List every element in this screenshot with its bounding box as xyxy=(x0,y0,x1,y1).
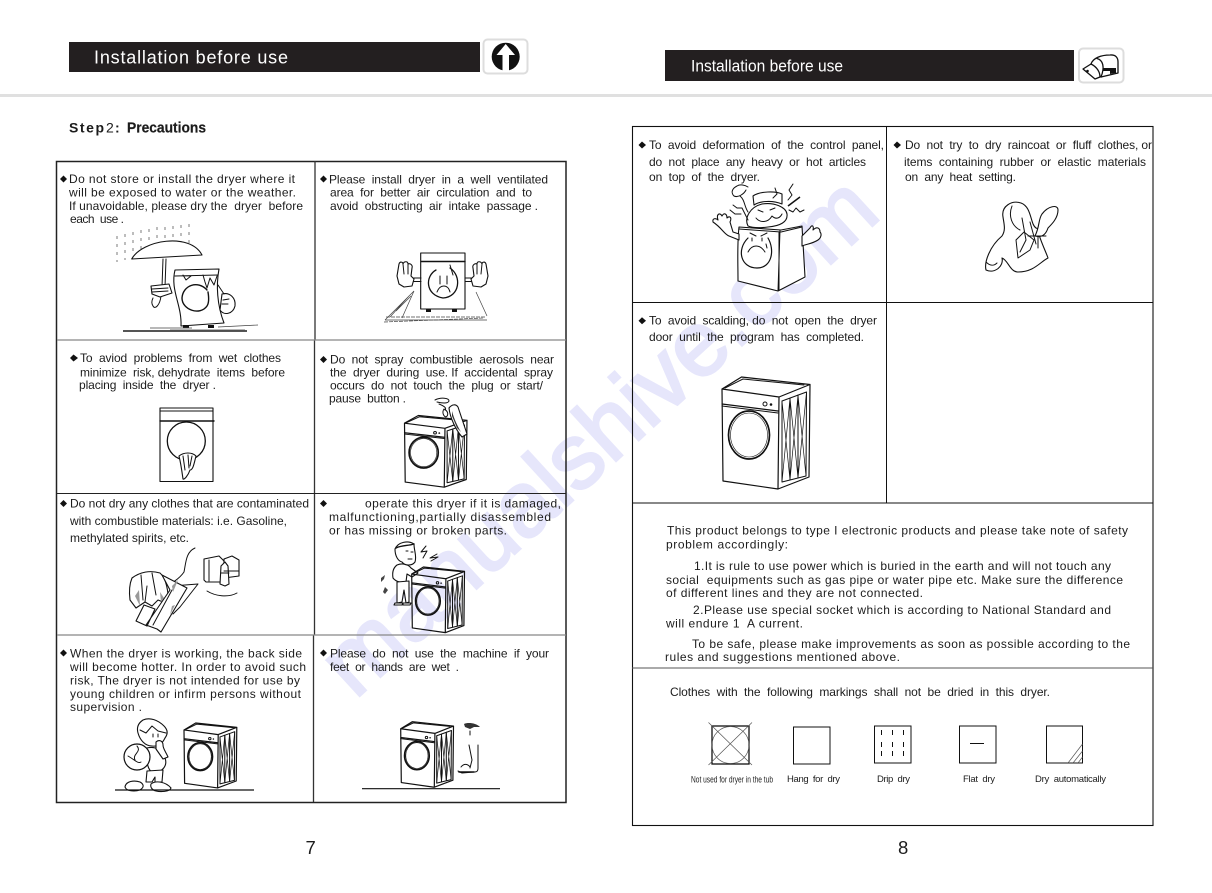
left page table xyxy=(56,161,566,802)
panel: wet hands xyxy=(320,646,549,789)
icon: dryer xyxy=(722,377,810,489)
text: aerosols: Do not spray combustible aerosols near xyxy=(330,353,554,367)
icon: crying dryer with kettle xyxy=(713,184,821,291)
text: care markings note: Clothes with the following markings shall not be dried in this dryer. xyxy=(670,685,1050,699)
panel: safety note xyxy=(665,524,1130,664)
panel: care markings xyxy=(670,685,1106,786)
text: contaminated clothes xyxy=(60,497,309,545)
text: raincoat and rubber: on any heat setting. xyxy=(905,170,1016,184)
text: wet hands: feet or hands are wet . xyxy=(330,660,459,674)
text: control panel deformation: on top of the dryer. xyxy=(649,170,760,184)
icon: clothes and fuel cans xyxy=(129,548,239,632)
text: control panel deformation: To avoid deformation of the control panel, xyxy=(649,138,884,152)
text: hot back side: When the dryer is working, the back side xyxy=(70,646,302,660)
panel: hot back side xyxy=(60,646,306,792)
text: store away from water xyxy=(60,172,303,226)
text: ventilation xyxy=(320,172,548,213)
watermark: manualshive.com xyxy=(300,156,896,715)
icon: dryer with wet foot xyxy=(362,722,500,789)
step heading: Step xyxy=(69,120,104,136)
page number 7: 7 xyxy=(306,837,316,858)
header title left: Installation before use xyxy=(94,48,288,68)
label: not for tumble dryer: Not used for dryer in the tub xyxy=(691,774,773,786)
panel: safety note: of different lines and they are not connected. xyxy=(666,586,923,600)
text: wet clothes: placing inside the dryer . xyxy=(79,378,216,392)
text: aerosols: the dryer during use. If accidental spray xyxy=(330,366,553,380)
right page table xyxy=(632,126,1153,826)
text: raincoat and rubber: items containing rubber or elastic materials xyxy=(904,155,1146,169)
text: aerosols: pause button . xyxy=(329,392,406,406)
header bar right xyxy=(665,50,1074,81)
icon: not for tumble dryer xyxy=(708,722,752,765)
text: scalding: door until the program has completed. xyxy=(649,330,864,344)
step heading xyxy=(69,120,206,136)
label: flat dry: Flat dry xyxy=(963,774,995,785)
text: store away from water: will be exposed to water or the weather. xyxy=(68,186,296,200)
panel: scalding xyxy=(638,314,877,489)
text: damaged dryer: operate this dryer if it is damaged, xyxy=(365,497,561,511)
text: contaminated clothes: Do not dry any clothes that are contaminated xyxy=(70,497,309,511)
label: drip dry: Drip dry xyxy=(877,774,910,785)
text: wet clothes: minimize risk, dehydrate items before xyxy=(80,366,285,380)
text: hot back side: risk, The dryer is not intended for use by xyxy=(70,673,300,687)
panel: store away from water xyxy=(60,172,303,331)
text: ventilation: area for better air circulation and to xyxy=(330,186,532,200)
panel: safety note: 1.It is rule to use power which is buried in the earth and will not touch any xyxy=(694,559,1111,573)
page number 8: 8 xyxy=(898,837,908,858)
left page header xyxy=(69,40,528,74)
panel: wet clothes xyxy=(70,351,285,482)
icon: drip dry xyxy=(874,726,911,763)
panel: aerosols xyxy=(320,353,554,487)
text: damaged dryer: or has missing or broken parts. xyxy=(329,524,507,538)
icon: mailbox xyxy=(1079,48,1124,82)
text: hot back side: will become hotter. In order to avoid such xyxy=(69,660,306,674)
icon: dry automatically xyxy=(1046,726,1082,763)
header bar left xyxy=(69,42,480,72)
panel: safety note: problem accordingly: xyxy=(666,538,788,552)
table frame left xyxy=(56,161,566,802)
panel: ventilation xyxy=(320,172,548,322)
text: hot back side: supervision . xyxy=(70,700,142,714)
text: raincoat and rubber: Do not try to dry raincoat or fluff clothes, or xyxy=(905,138,1152,152)
text: scalding: To avoid scalding, do not open the dryer xyxy=(649,314,877,328)
text: store away from water: If unavoidable, please dry the dryer before xyxy=(69,199,303,213)
icon: dryer with aerosol can xyxy=(404,398,467,487)
table frame right xyxy=(632,126,1153,826)
text: hot back side: young children or infirm persons without xyxy=(70,687,302,701)
text: store away from water: Do not store or install the dryer where it xyxy=(69,172,296,186)
text: ventilation: Please install dryer in a well ventilated xyxy=(329,172,548,186)
text: wet clothes xyxy=(70,351,285,392)
icon: dryer under umbrella xyxy=(117,224,258,331)
text: contaminated clothes: with combustible materials: i.e. Gasoline, xyxy=(69,514,287,528)
panel: safety note: will endure 1 A current. xyxy=(665,617,803,631)
panel: safety note: social equipments such as gas pipe or water pipe etc. Make sure the difference xyxy=(666,573,1123,587)
panel: contaminated clothes xyxy=(60,497,309,632)
header title right: Installation before use xyxy=(691,56,843,76)
panel: safety note: This product belongs to type I electronic products and please take note of safety xyxy=(667,524,1128,538)
icon: hang for dry xyxy=(794,727,830,764)
icon: sad dryer with raised hands xyxy=(384,253,488,322)
panel: control panel deformation xyxy=(638,138,884,291)
icon: flat dry xyxy=(960,726,996,763)
icon: dryer with wet clothes xyxy=(160,408,214,482)
text: hot back side xyxy=(60,646,306,714)
icon: man fixing dryer xyxy=(381,542,464,633)
text: scalding xyxy=(638,314,877,344)
label: dry automatically: Dry automatically xyxy=(1035,774,1106,785)
text: store away from water: each use . xyxy=(70,212,124,226)
right page header xyxy=(665,48,1124,82)
icon: child beside dryer xyxy=(115,719,254,792)
text: wet hands xyxy=(320,646,549,674)
step heading: : xyxy=(115,120,120,136)
text: ventilation: avoid obstructing air intake passage . xyxy=(330,199,538,213)
text: aerosols: occurs do not touch the plug or start/ xyxy=(330,378,544,392)
text: control panel deformation xyxy=(638,138,884,184)
icon: raincoat xyxy=(986,202,1058,272)
text: contaminated clothes: methylated spirits, etc. xyxy=(70,531,189,545)
text: damaged dryer: malfunctioning,partially disassembled xyxy=(329,510,551,524)
step heading: 2 xyxy=(106,120,114,136)
panel: safety note: rules and suggestions mentioned above. xyxy=(665,650,900,664)
text: raincoat and rubber xyxy=(894,138,1152,184)
text: control panel deformation: do not place any heavy or hot articles xyxy=(649,155,866,169)
text: aerosols xyxy=(320,353,554,406)
text: wet hands: Please do not use the machine if your xyxy=(330,646,549,660)
divider band xyxy=(0,94,1212,97)
text: wet clothes: To aviod problems from wet clothes xyxy=(80,351,281,365)
icon: up arrow xyxy=(484,40,528,74)
panel: safety note: 2.Please use special socket which is according to National Standard and xyxy=(693,603,1111,617)
panel: safety note: To be safe, please make improvements as soon as possible according to the xyxy=(692,637,1130,651)
panel: damaged dryer xyxy=(320,497,561,633)
label: hang for dry: Hang for dry xyxy=(787,774,840,785)
step heading: Precautions xyxy=(127,120,206,136)
panel: raincoat and rubber xyxy=(894,138,1152,272)
text: damaged dryer xyxy=(320,497,561,538)
